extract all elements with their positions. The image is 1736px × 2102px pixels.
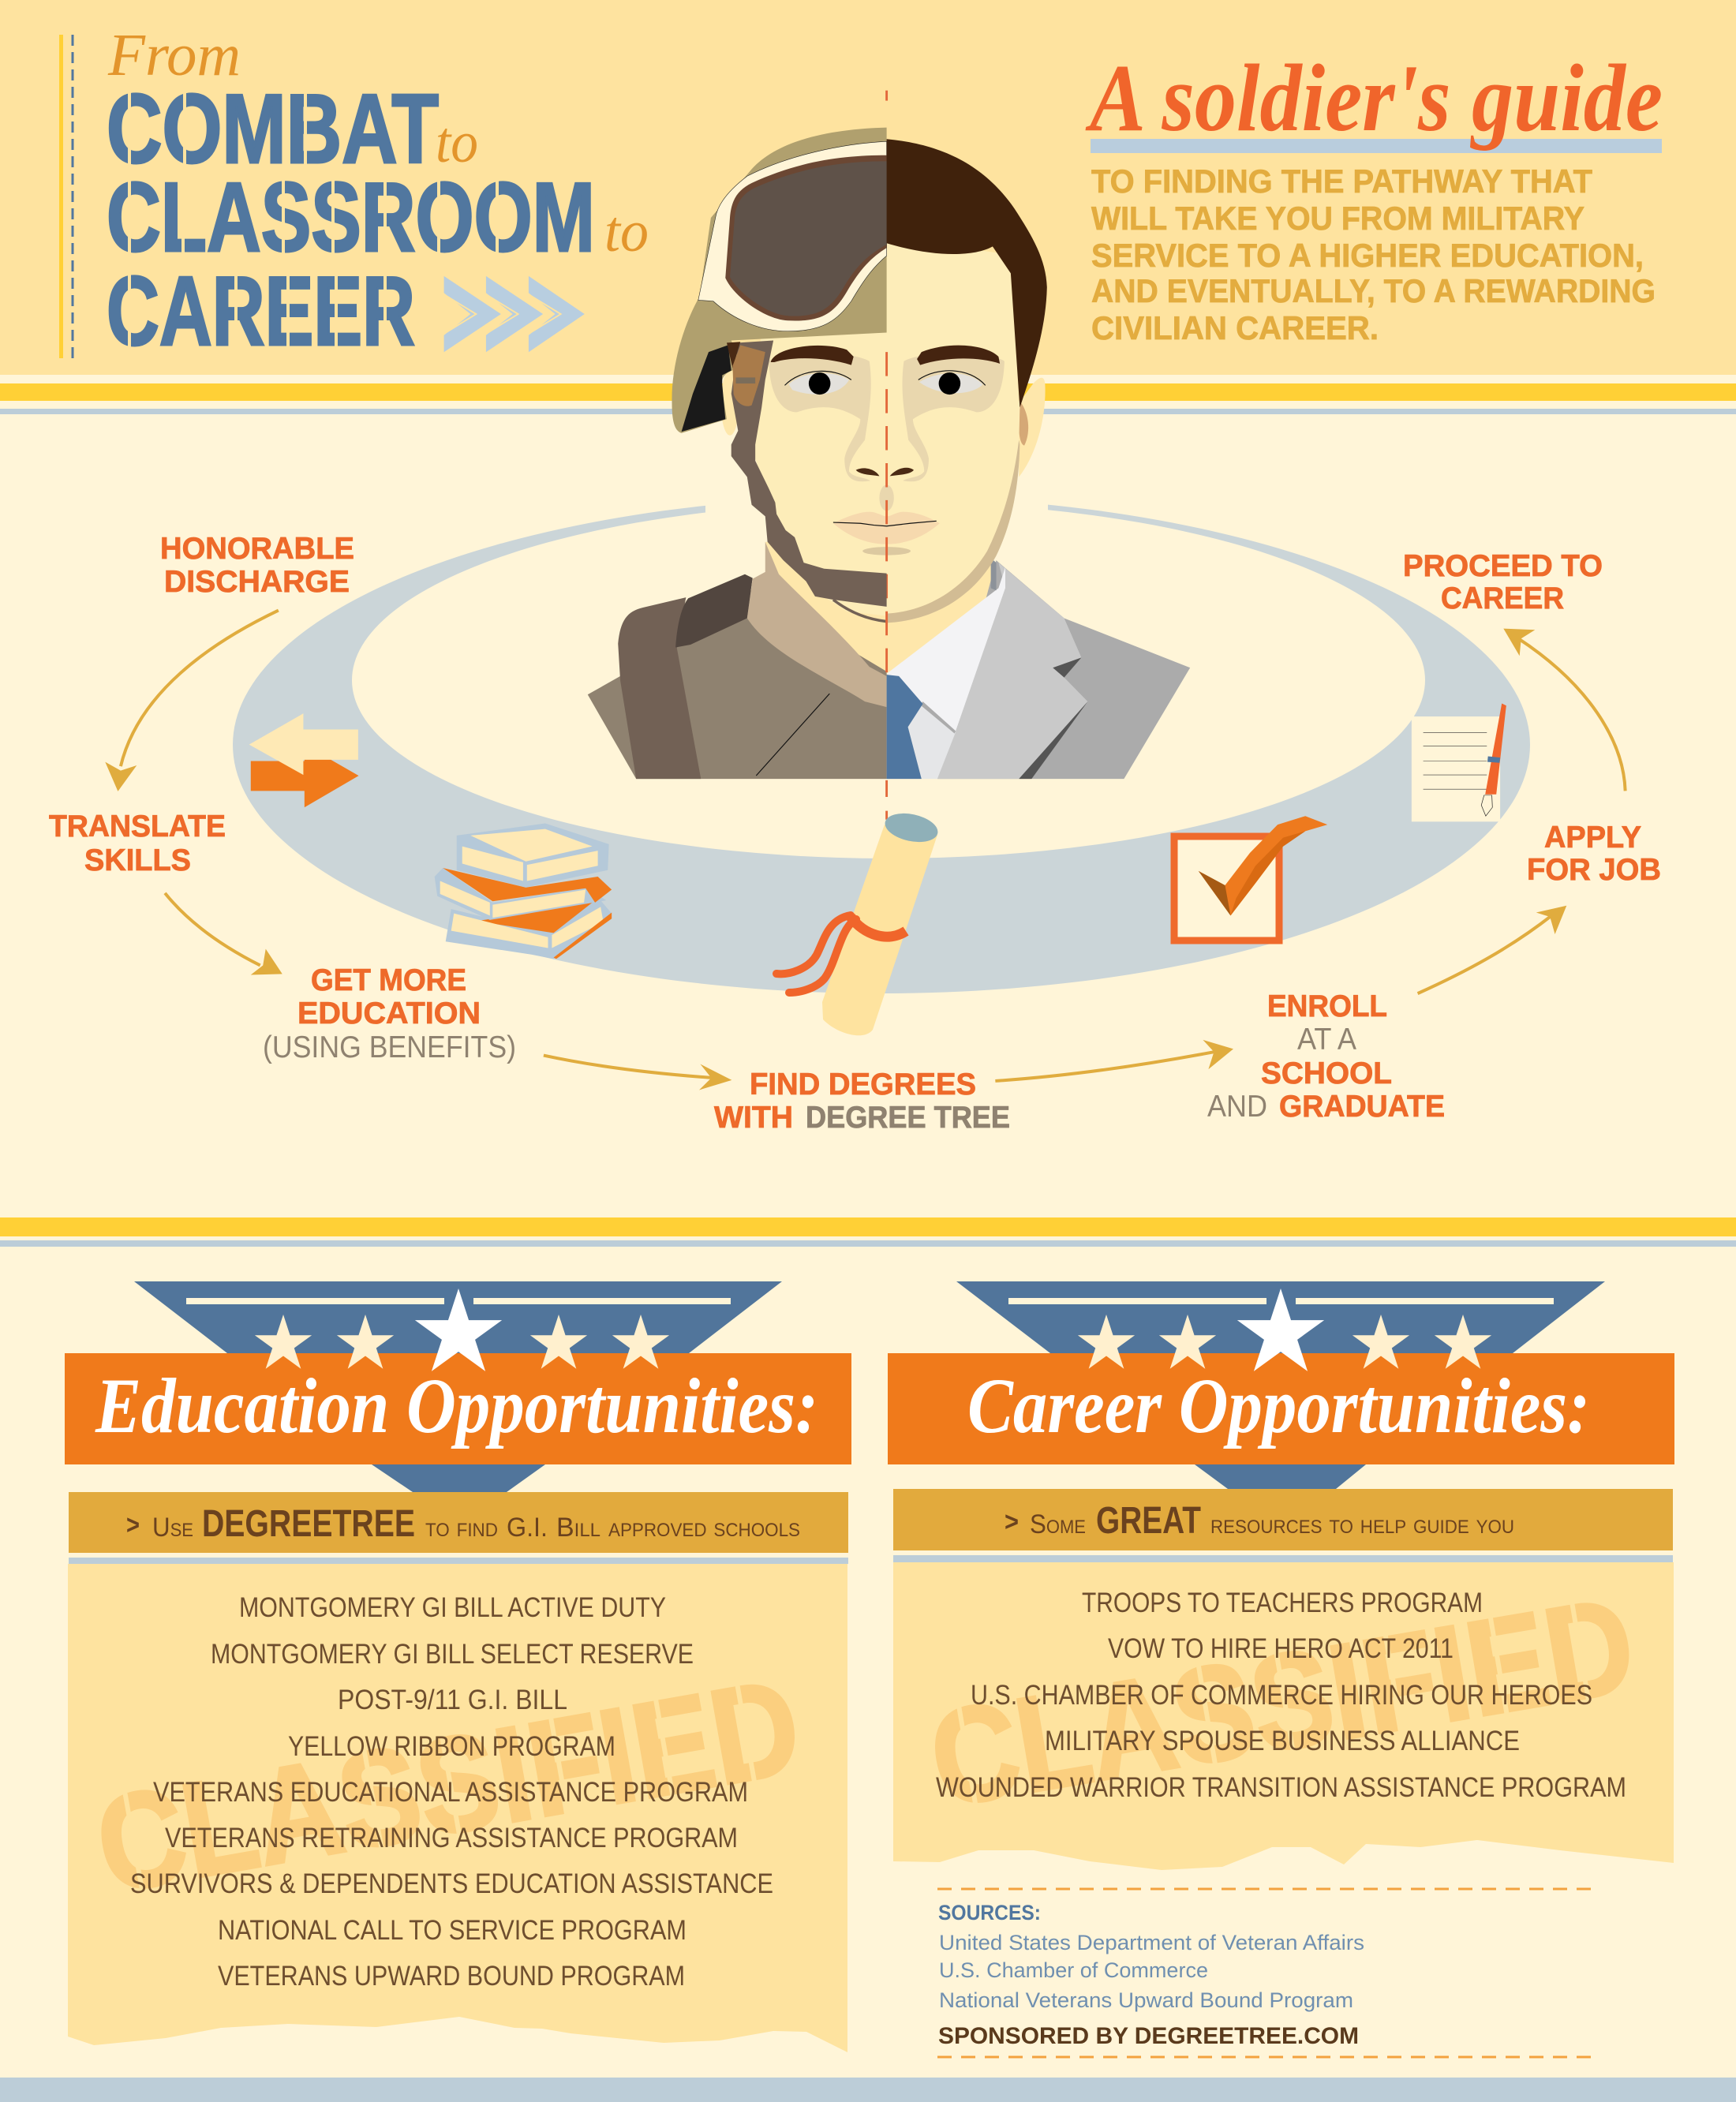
- list: education programs: MONTGOMERY GI BILL SELECT RESERVE: [211, 1639, 694, 1670]
- sources block: SPONSORED BY DEGREETREE.COM: [938, 2023, 1359, 2049]
- portrait: strap buckle: [727, 342, 765, 406]
- subheader: education: [69, 1492, 848, 1564]
- panel: education opportunities: [65, 1281, 851, 2052]
- step: get more education: GET MORE: [311, 963, 466, 997]
- step: honorable discharge: DISCHARGE: [164, 565, 350, 599]
- sources block: National Veterans Upward Bound Program: [939, 1988, 1353, 2012]
- title: COMBAT: [107, 75, 439, 184]
- portrait: center dashed line: [885, 91, 889, 820]
- banner: education: [65, 1281, 851, 1492]
- list: education programs: VETERANS RETRAINING ASSISTANCE PROGRAM: [165, 1823, 738, 1853]
- step: get more education: [263, 963, 516, 1064]
- flow arrow: translate to education: [165, 893, 282, 975]
- intro text: SERVICE TO A HIGHER EDUCATION,: [1091, 237, 1644, 274]
- title: From: [107, 22, 241, 88]
- torn paper: education: [68, 1564, 847, 2052]
- list: education programs: [130, 1592, 773, 1992]
- footer bar: [0, 2078, 1736, 2102]
- flow arrow: discharge to translate: [105, 611, 279, 791]
- intro text: WILL TAKE YOU FROM MILITARY: [1091, 200, 1584, 237]
- subheader: education: >: [126, 1510, 140, 1540]
- step: proceed to career: PROCEED TO: [1403, 549, 1603, 583]
- title: to: [436, 110, 478, 175]
- portrait: face: [752, 236, 1020, 616]
- step: get more education: EDUCATION: [297, 997, 481, 1030]
- icon: chevrons: [444, 276, 585, 352]
- flow arrow: degrees to enroll: [995, 1040, 1233, 1081]
- sources block: [937, 1889, 1594, 2057]
- portrait: soldier uniform: [588, 542, 887, 779]
- subheader: career: >: [1005, 1507, 1019, 1537]
- icon: paper and pen: [1412, 704, 1506, 821]
- portrait: neck: [765, 542, 998, 676]
- list: education programs: VETERANS EDUCATIONAL ASSISTANCE PROGRAM: [153, 1777, 748, 1808]
- list: education programs: VETERANS UPWARD BOUND PROGRAM: [218, 1961, 685, 1992]
- portrait: civilian suit: [887, 558, 1190, 779]
- icon: books: [435, 824, 612, 959]
- subheader: education: Use: [152, 1513, 193, 1543]
- section divider: [0, 1217, 1736, 1247]
- step: find degrees: WITH: [714, 1101, 793, 1135]
- step: translate skills: SKILLS: [84, 843, 191, 877]
- intro text: AND EVENTUALLY, TO A REWARDING: [1091, 272, 1656, 309]
- portrait: helmet interior: [682, 345, 731, 432]
- icon: checkbox: [1174, 816, 1327, 941]
- portrait: nose: [856, 468, 914, 476]
- step: enroll and graduate: GRADUATE: [1279, 1090, 1445, 1124]
- title: CAREER: [107, 257, 415, 366]
- flow arrow: education to degrees: [544, 1056, 731, 1090]
- list: education programs: NATIONAL CALL TO SERVICE PROGRAM: [218, 1915, 687, 1946]
- subheader: career: Some: [1030, 1509, 1086, 1539]
- step: honorable discharge: [160, 532, 354, 599]
- subheader: career: [893, 1489, 1673, 1562]
- step: get more education: (USING BENEFITS): [263, 1030, 516, 1064]
- portrait: facial shadows: [769, 353, 1005, 511]
- torn paper: career: [893, 1562, 1674, 1870]
- sources block: United States Department of Veteran Affairs: [939, 1931, 1364, 1954]
- stamp: classified: CLASSIFIED: [86, 1650, 810, 1922]
- step: translate skills: TRANSLATE: [49, 810, 226, 843]
- list: career programs: U.S. CHAMBER OF COMMERCE HIRING OUR HEROES: [971, 1680, 1592, 1711]
- icon: transition arrows: [249, 713, 359, 807]
- step: enroll and graduate: [1207, 989, 1445, 1124]
- portrait: hair: [887, 139, 1047, 408]
- title: [107, 22, 649, 366]
- list: education programs: MONTGOMERY GI BILL ACTIVE DUTY: [239, 1592, 666, 1623]
- flow arrow: apply to career: [1503, 629, 1626, 791]
- banner: career: Career Opportunities:: [967, 1362, 1590, 1449]
- list: education programs: YELLOW RIBBON PROGRAM: [288, 1731, 615, 1762]
- step: enroll and graduate: AND: [1207, 1090, 1267, 1124]
- portrait: eyebrows: [771, 346, 1000, 365]
- portrait: chin strap: [731, 340, 887, 607]
- step: enroll and graduate: ENROLL: [1267, 989, 1387, 1023]
- panel: career opportunities: [888, 1281, 1674, 1870]
- step: apply for job: [1527, 821, 1661, 887]
- title: to: [604, 200, 649, 264]
- step: proceed to career: [1403, 549, 1603, 615]
- ring path: [233, 485, 1530, 993]
- portrait: helmet: [672, 128, 887, 433]
- list: education programs: POST-9/11 G.I. BILL: [338, 1685, 567, 1715]
- icon: diploma: [776, 809, 941, 1035]
- banner: career: [888, 1281, 1674, 1489]
- portrait: jaw shadow: [887, 440, 1020, 623]
- subheader: education: to find: [425, 1513, 498, 1543]
- subheader: career: GREAT: [1096, 1500, 1201, 1542]
- title: CLASSROOM: [107, 163, 595, 272]
- step: proceed to career: CAREER: [1441, 582, 1564, 615]
- portrait: soldier and civilian: [588, 91, 1190, 820]
- portrait: right ear: [1019, 378, 1046, 477]
- step: enroll and graduate: SCHOOL: [1261, 1057, 1392, 1090]
- header band: [0, 0, 1736, 414]
- step: honorable discharge: HONORABLE: [160, 532, 354, 566]
- subheader: education: Bill: [556, 1513, 600, 1543]
- subheader: education: approved schools: [608, 1513, 800, 1543]
- sources block: U.S. Chamber of Commerce: [939, 1958, 1208, 1982]
- intro text: TO FINDING THE PATHWAY THAT: [1091, 163, 1592, 200]
- portrait: eyes: [784, 371, 986, 395]
- portrait: lips: [833, 512, 940, 555]
- step: apply for job: FOR JOB: [1527, 853, 1661, 887]
- portrait: left ear: [721, 371, 739, 436]
- list: education programs: SURVIVORS & DEPENDENTS EDUCATION ASSISTANCE: [130, 1868, 773, 1899]
- subtitle: a soldier's guide: A soldier's guide: [1085, 45, 1663, 151]
- sources block: SOURCES:: [938, 1901, 1041, 1924]
- subheader: education: G.I.: [507, 1513, 548, 1543]
- banner: education: Education Opportunities:: [95, 1362, 818, 1449]
- subheader: education: DEGREETREE: [202, 1503, 415, 1545]
- intro text: [1091, 163, 1656, 346]
- step: apply for job: APPLY: [1544, 821, 1641, 855]
- step: find degrees: [714, 1068, 1010, 1135]
- step: find degrees: FIND DEGREES: [750, 1068, 976, 1101]
- portrait: goggles: [698, 141, 887, 331]
- list: career programs: VOW TO HIRE HERO ACT 2011: [1108, 1633, 1454, 1664]
- step: find degrees: DEGREE TREE: [806, 1101, 1010, 1135]
- step: enroll and graduate: AT A: [1297, 1023, 1356, 1057]
- list: career programs: TROOPS TO TEACHERS PROGRAM: [1082, 1588, 1483, 1618]
- step: translate skills: [49, 810, 226, 877]
- list: career programs: WOUNDED WARRIOR TRANSITION ASSISTANCE PROGRAM: [936, 1772, 1626, 1803]
- stamp: classified: CLASSIFIED: [920, 1569, 1644, 1836]
- flow arrow: enroll to apply: [1418, 906, 1566, 993]
- list: career programs: MILITARY SPOUSE BUSINESS ALLIANCE: [1045, 1726, 1520, 1756]
- subheader: career: resources to help guide you: [1210, 1509, 1514, 1539]
- intro text: CIVILIAN CAREER.: [1091, 309, 1379, 346]
- list: career programs: [936, 1588, 1626, 1803]
- title rule lines: [59, 35, 73, 358]
